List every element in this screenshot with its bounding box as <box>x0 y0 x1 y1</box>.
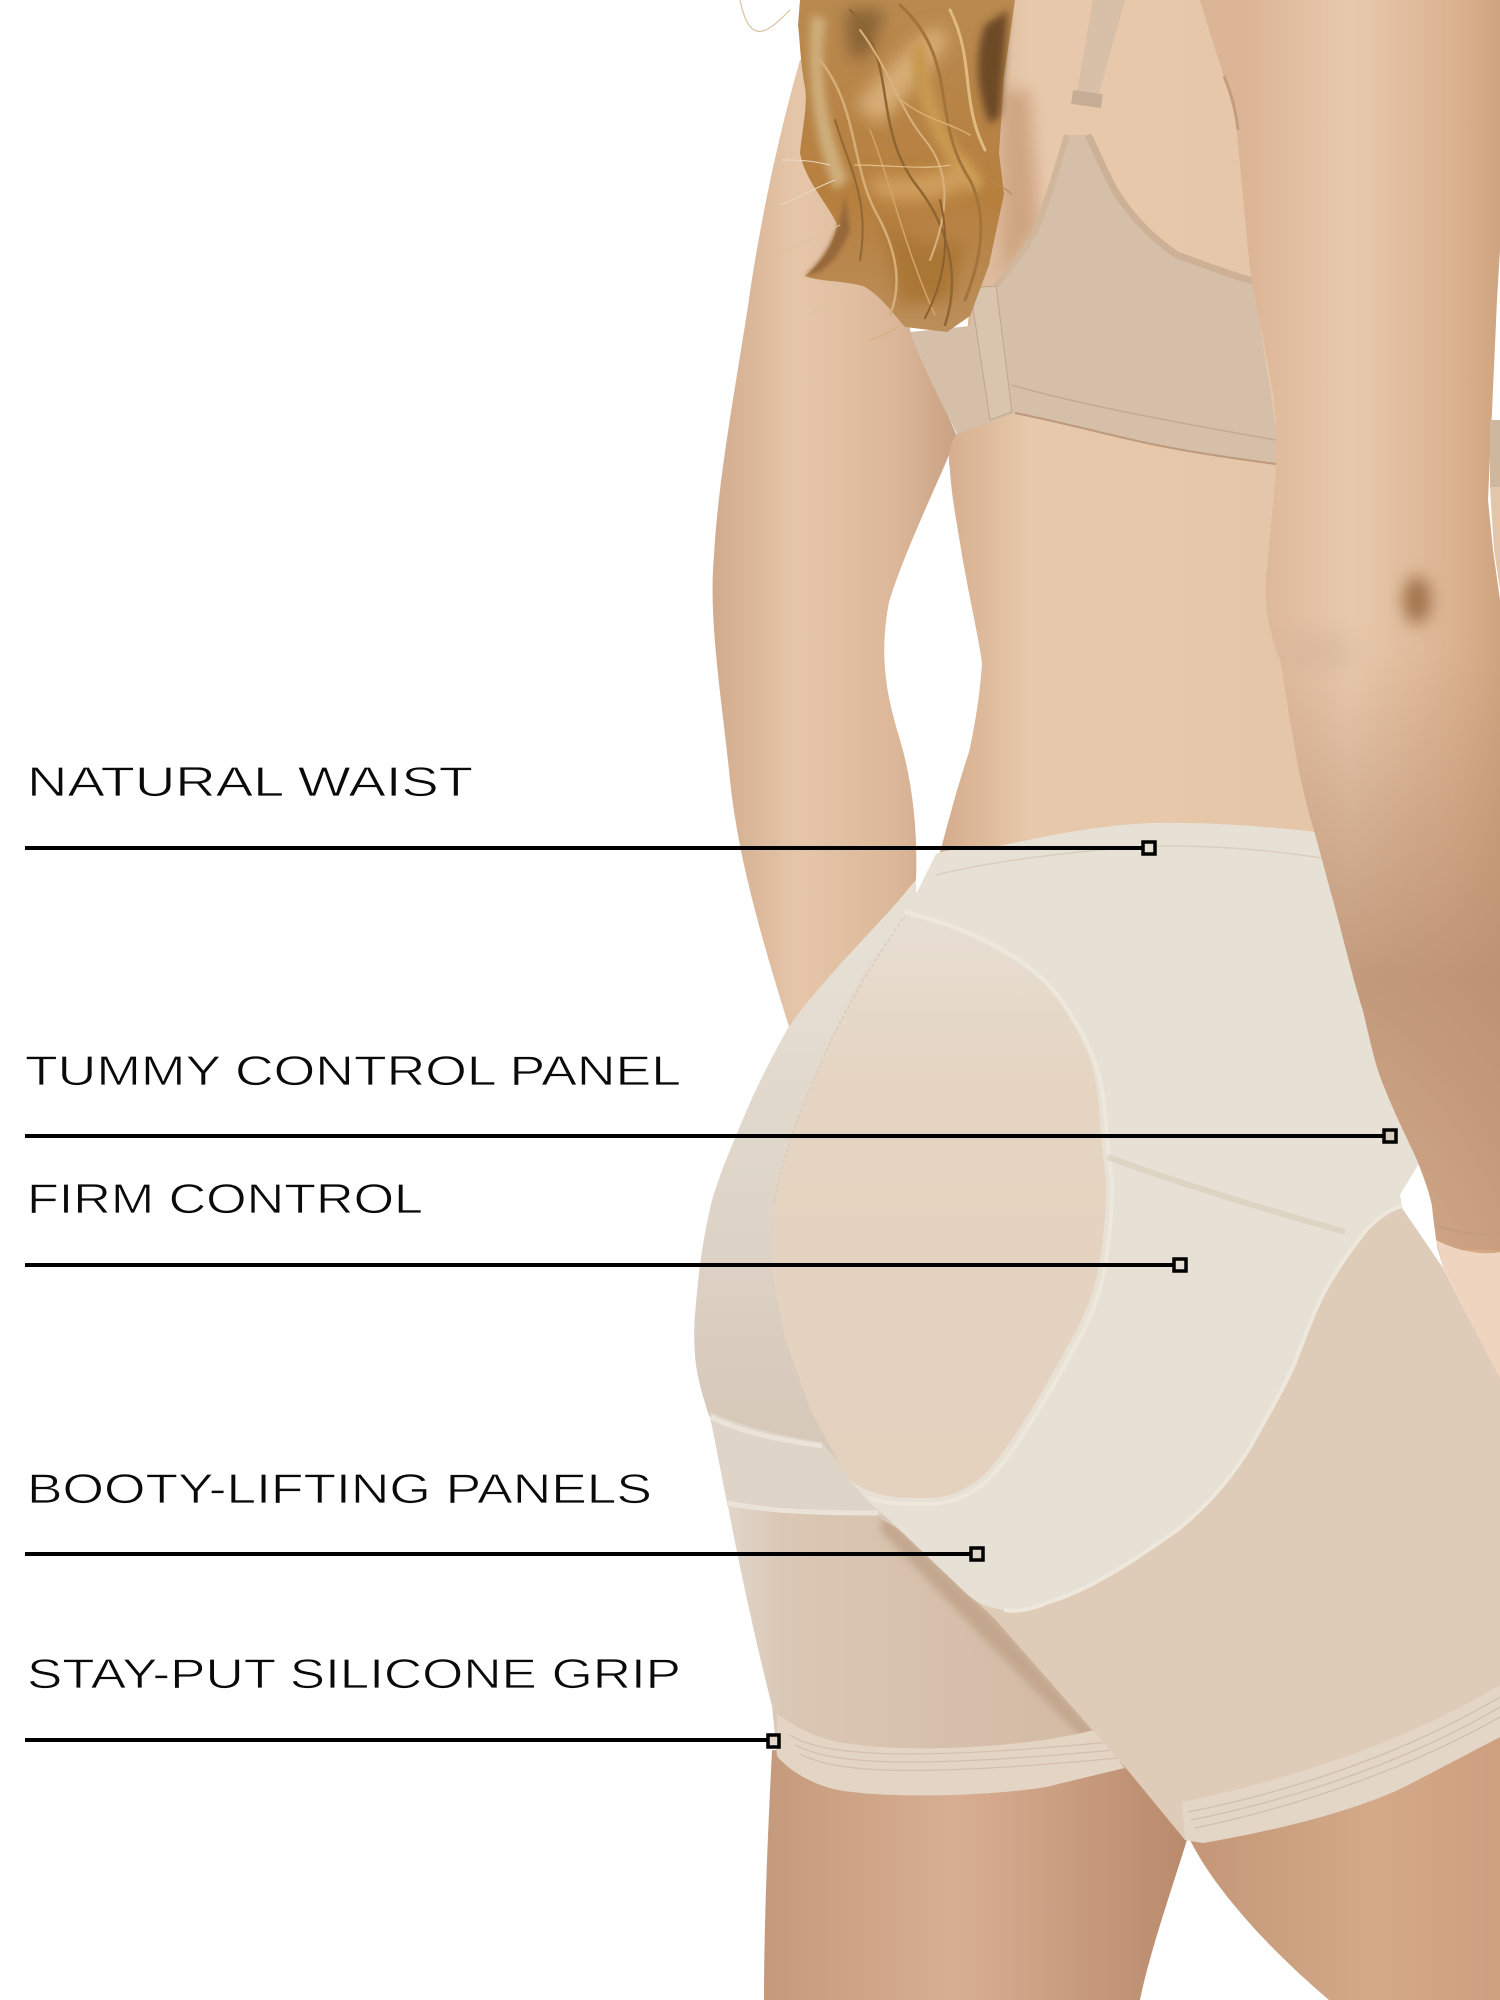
model photo illustration <box>694 0 1500 2000</box>
skin beyond arm <box>1490 487 1500 590</box>
forearm shading <box>1268 600 1500 1250</box>
label: natural waist: NATURAL WAIST <box>27 758 473 805</box>
label: tummy control panel <box>25 1047 1396 1142</box>
hem stripes: front leg <box>1188 1697 1500 1828</box>
bra lower edge <box>1015 413 1276 464</box>
label: booty-lifting panels <box>25 1465 983 1560</box>
label: natural waist <box>25 758 1155 854</box>
elbow lilac shadow <box>1280 632 1360 668</box>
hair <box>798 0 1015 332</box>
hand <box>1436 1240 1500 1379</box>
thigh crease shadow <box>880 1515 1125 1768</box>
bra hook closure <box>970 286 1012 420</box>
front leg skin <box>1190 1730 1500 2000</box>
elbow shadow <box>1403 576 1431 624</box>
panel seam stitching <box>870 912 1402 1611</box>
bra strap <box>1077 0 1125 97</box>
bra side sliver <box>1490 420 1500 487</box>
under-seat band <box>709 1411 884 1515</box>
armpit crease <box>1224 76 1238 130</box>
hair strands <box>740 0 1012 340</box>
waistband stitching <box>774 846 1345 1232</box>
front thigh mesh <box>884 1208 1500 1843</box>
right arm and shoulder <box>1200 0 1500 1379</box>
left arm <box>713 60 957 1030</box>
upper back shadow by hair <box>1000 90 1040 285</box>
back thigh mesh <box>709 1411 1125 1795</box>
label: stay-put silicone grip: STAY-PUT SILICONE GRIP <box>27 1650 681 1697</box>
label: firm control <box>25 1175 1186 1271</box>
bra strap slider <box>1071 90 1103 108</box>
hair tone patches <box>805 10 1008 305</box>
bra edge binding <box>1088 135 1253 281</box>
back leg skin <box>764 1750 1190 2000</box>
hem stripes: back leg <box>790 1735 1118 1770</box>
hem band: front leg <box>1182 1685 1500 1843</box>
under-seat seams <box>711 1417 878 1513</box>
left cheek silhouette <box>694 880 920 1530</box>
torso <box>938 0 1340 860</box>
opaque control panel <box>847 823 1421 1611</box>
wrist crease <box>1435 1225 1500 1235</box>
hem band: back leg <box>777 1714 1124 1795</box>
bra band stitching <box>1012 385 1276 440</box>
bra inner edge binding <box>996 135 1067 286</box>
sheer seat mesh <box>772 916 1106 1498</box>
label: booty-lifting panels: BOOTY-LIFTING PANELS <box>27 1465 652 1512</box>
label: firm control: FIRM CONTROL <box>27 1175 423 1222</box>
label: stay-put silicone grip <box>25 1650 779 1747</box>
bra back panel <box>910 135 1276 464</box>
label: tummy control panel: TUMMY CONTROL PANEL <box>25 1047 681 1094</box>
